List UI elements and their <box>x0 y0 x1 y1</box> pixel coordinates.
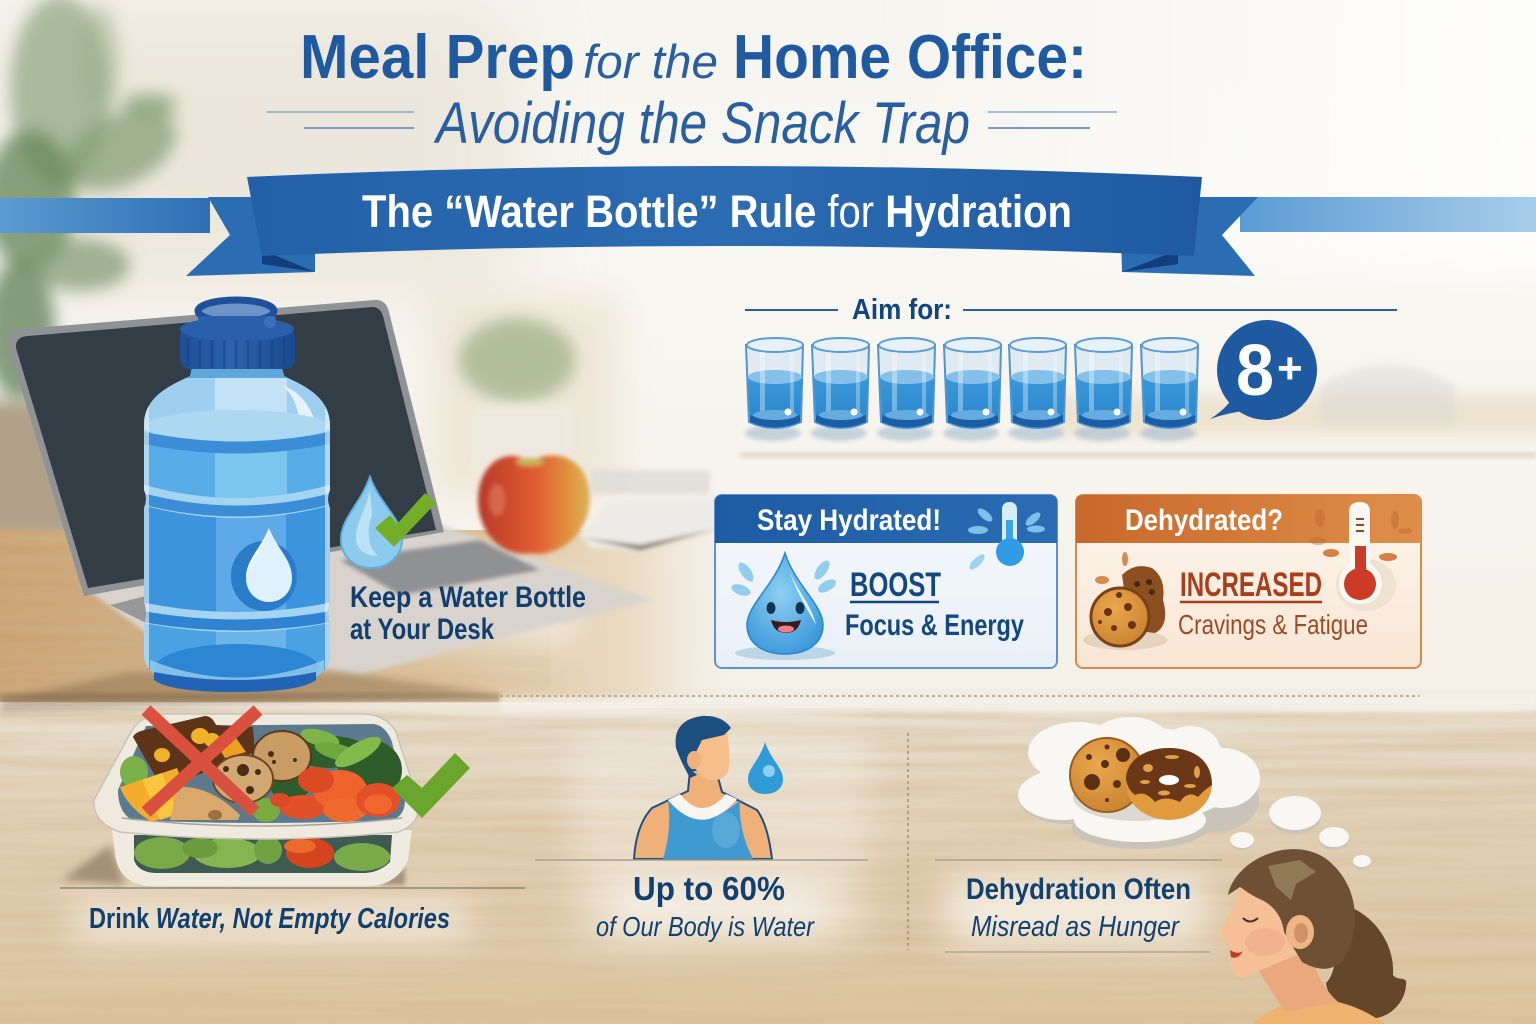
tub and glass <box>112 830 412 886</box>
aim for label: Aim for: <box>852 294 952 326</box>
subtitle with side rules: Avoiding the Snack Trap <box>433 91 970 156</box>
caption: keep a water bottle: at Your Desk <box>350 613 494 646</box>
stay hydrated heading: Stay Hydrated! <box>757 504 941 537</box>
small water drop <box>748 742 783 794</box>
icon: red cross <box>146 710 258 812</box>
bottle drop emblem <box>231 528 297 611</box>
rim <box>94 714 419 839</box>
caption: dehydration misread: Misread as Hunger <box>971 911 1180 943</box>
greens in the tub <box>134 836 390 871</box>
white veils behind text <box>70 580 1205 945</box>
meal prep container <box>62 710 470 886</box>
icon: green check <box>392 753 470 818</box>
title: Home Office: <box>733 23 1087 92</box>
blurred plant, centre <box>459 318 575 485</box>
caption: drink water: Drink Water, Not Empty Calories <box>89 903 450 935</box>
food: greens <box>120 725 402 822</box>
ribbon banner <box>0 166 1536 276</box>
caption: dehydration misread: Dehydration Often <box>966 873 1191 906</box>
bottle body <box>140 366 334 692</box>
caption: dehydration misread <box>966 873 1191 943</box>
notebook on desk <box>580 470 720 550</box>
icon: hot thermometer <box>1310 502 1412 611</box>
water bottle <box>0 300 500 712</box>
laptop <box>8 300 652 675</box>
apple <box>478 455 590 554</box>
icon: smiling water drop <box>730 553 838 660</box>
icon: water drop with check mark <box>341 477 436 568</box>
dehydrated heading: Dehydrated? <box>1125 504 1283 537</box>
icon: cookies <box>1083 552 1167 650</box>
stat: up to 60%: of Our Body is Water <box>596 911 815 942</box>
blurred plant, left <box>0 0 189 400</box>
increased text: INCREASED <box>1180 566 1322 604</box>
speech bubble: 8+: 8 <box>1236 331 1274 411</box>
row of seven water glasses <box>745 338 1198 441</box>
stat: up to 60%: Up to 60% <box>633 870 785 907</box>
boost text <box>845 566 1024 642</box>
speech bubble: 8+ <box>1210 320 1317 420</box>
title <box>300 23 1087 92</box>
title: for the <box>583 35 718 88</box>
icon: person with water drop <box>634 716 783 859</box>
title: Meal Prep <box>300 23 575 92</box>
panel: dehydrated <box>1076 495 1421 668</box>
bottle base <box>154 672 316 692</box>
increased text: Cravings & Fatigue <box>1178 609 1368 640</box>
increased text <box>1178 566 1368 640</box>
caption: keep a water bottle <box>350 581 586 646</box>
icon: thought bubble with cookie and donut <box>1018 717 1371 869</box>
stat: up to 60% <box>596 870 815 942</box>
icon: woman thinking <box>1221 849 1406 1024</box>
boost text: BOOST <box>850 566 941 604</box>
panel: stay hydrated <box>715 495 1057 668</box>
caption: keep a water bottle: Keep a Water Bottle <box>350 581 586 614</box>
food: tomatoes <box>270 767 400 822</box>
food: cookies <box>213 731 311 803</box>
banner heading: The “Water Bottle” Rule for Hydration <box>362 186 1072 237</box>
bottle cap <box>180 300 295 369</box>
food: toast, corn and cheese <box>120 716 255 822</box>
speech bubble: 8+: + <box>1277 344 1303 393</box>
icon: cool thermometer <box>967 502 1045 572</box>
boost text: Focus & Energy <box>845 609 1024 642</box>
